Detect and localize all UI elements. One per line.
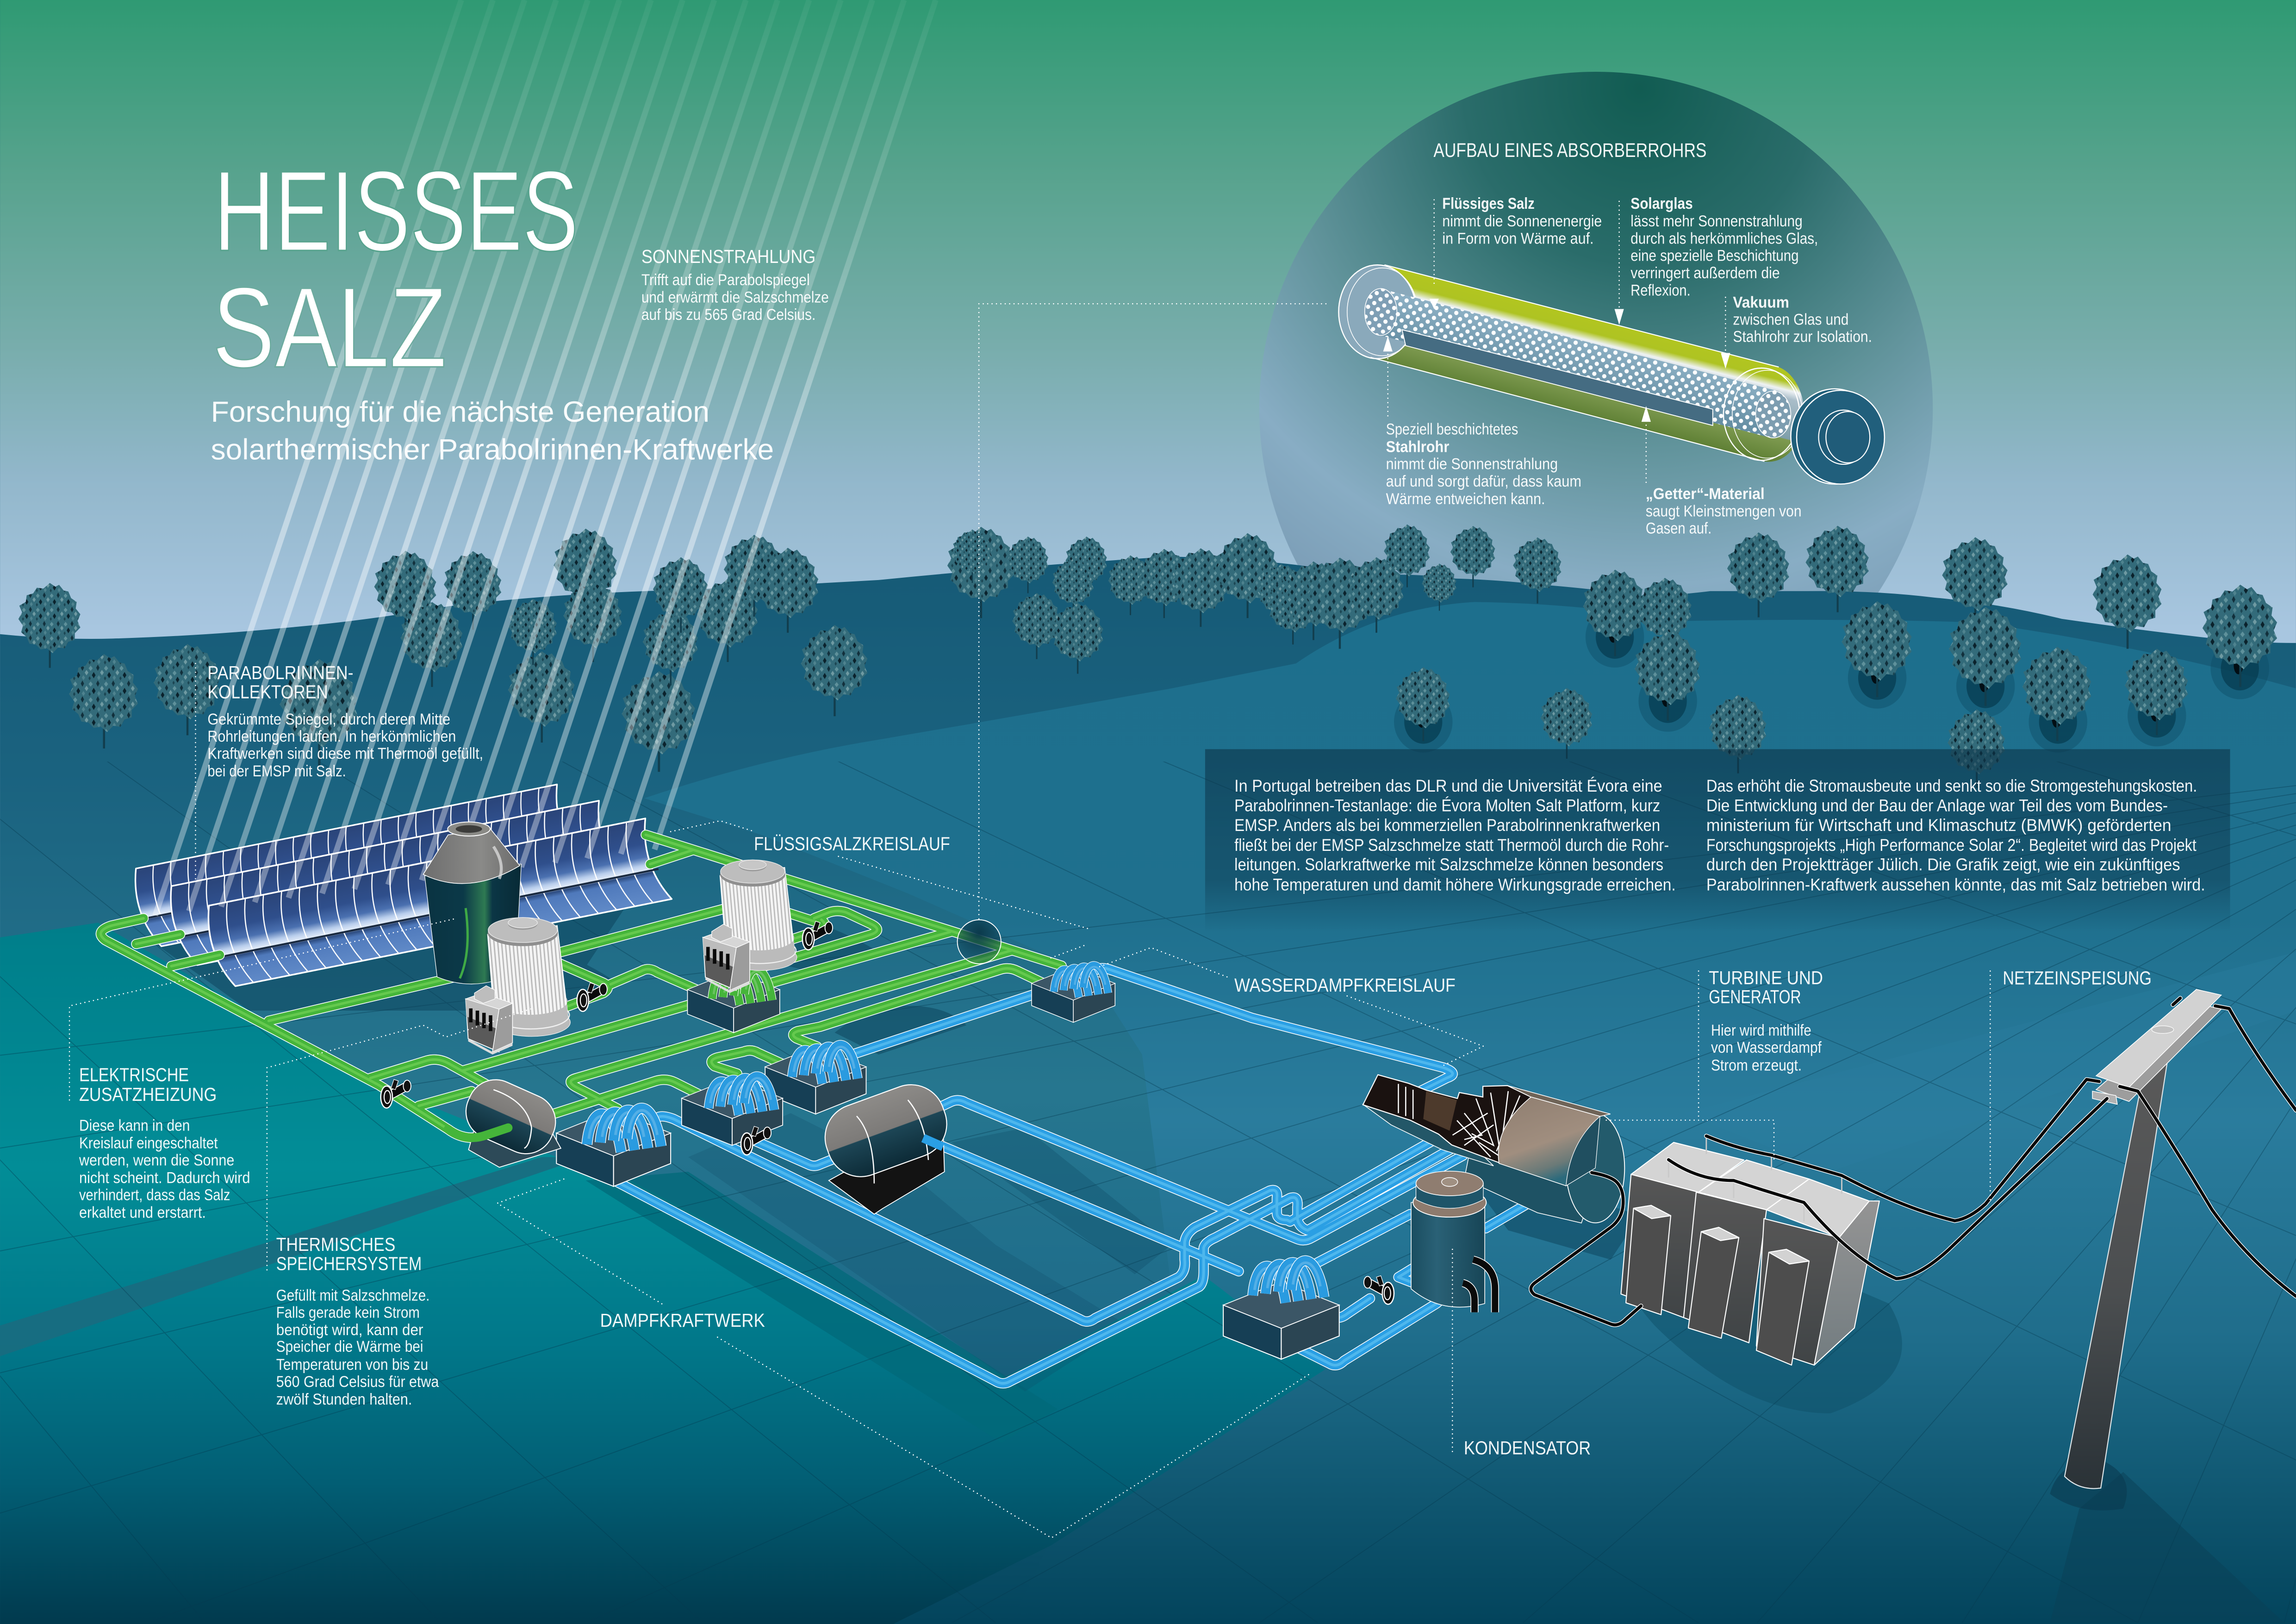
panel text: Aufbau eines Absorberrohrs: saugt Kleinstmengen von	[1646, 503, 1801, 520]
leader lines	[69, 663, 1990, 1538]
subtitle: Forschung für die nächste Generation	[211, 396, 709, 428]
panel text: Aufbau eines Absorberrohrs: nimmt die Sonnenstrahlung	[1386, 456, 1558, 473]
label: Turbine und Generator: GENERATOR	[1709, 986, 1801, 1007]
label: Sonnenstrahlung: und erwärmt die Salzschmelze	[641, 289, 829, 306]
text block: right column	[1706, 776, 2205, 894]
panel text: Aufbau eines Absorberrohrs: Stahlrohr zur Isolation.	[1733, 328, 1872, 346]
text block: left column: leitungen. Solarkraftwerke mit Salzschmelze können besonders	[1234, 855, 1663, 874]
sun rays	[155, 0, 936, 915]
label: Parabolrinnen-Kollektoren: Gekrümmte Spiegel, durch deren Mitte	[207, 711, 450, 728]
label: Elektrische Zusatzheizung	[79, 1064, 250, 1221]
panel text: Aufbau eines Absorberrohrs: Wärme entweichen kann.	[1386, 490, 1545, 508]
label: Thermisches Speichersystem: benötigt wird, kann der	[276, 1321, 423, 1339]
text block: right column: Forschungsprojekts „High Performance Solar 2“. Begleitet wird das Projekt	[1706, 836, 2196, 855]
cold salt tanks with controls	[466, 860, 796, 1055]
text panel background	[1205, 749, 2230, 932]
label: Kondensator: KONDENSATOR	[1464, 1437, 1591, 1459]
power pole	[2065, 989, 2221, 1488]
label: Sonnenstrahlung: Trifft auf die Parabolspiegel	[641, 271, 810, 289]
text block: left column: fließt bei der EMSP Salzschmelze statt Thermoöl durch die Rohr-	[1234, 836, 1669, 855]
label: Flüssigsalzkreislauf: FLÜSSIGSALZKREISLAUF	[754, 833, 950, 855]
heat tank on the salt circuit	[457, 1071, 565, 1168]
panel text: Aufbau eines Absorberrohrs: Vakuum	[1733, 294, 1789, 311]
panel text: Aufbau eines Absorberrohrs: „Getter“-Material	[1646, 485, 1765, 503]
label: Parabolrinnen-Kollektoren: bei der EMSP mit Salz.	[207, 762, 346, 780]
label: Thermisches Speichersystem: Speicher die Wärme bei	[276, 1338, 423, 1355]
label: Elektrische Zusatzheizung: ZUSATZHEIZUNG	[79, 1084, 217, 1105]
panel: absorber tube circle backdrop	[1259, 72, 1933, 745]
label: Sonnenstrahlung	[641, 246, 829, 324]
green molten salt pipes	[101, 835, 1062, 1138]
panel text: Aufbau eines Absorberrohrs: lässt mehr Sonnenstrahlung	[1630, 212, 1803, 230]
text block: right column: Parabolrinnen-Kraftwerk aussehen könnte, das mit Salz betrieben wird.	[1706, 875, 2205, 894]
panel text: Aufbau eines Absorberrohrs: AUFBAU EINES ABSORBERROHRS	[1433, 139, 1706, 161]
absorber tube pointers	[979, 200, 1730, 919]
absorber tube illustration	[1338, 265, 1885, 484]
pipe end into heat tank	[448, 1128, 508, 1138]
label: Thermisches Speichersystem: Gefüllt mit Salzschmelze.	[276, 1287, 429, 1304]
text block: left column: EMSP. Anders als bei kommerziellen Parabolrinnenkraftwerken	[1234, 816, 1660, 835]
landscape ground	[0, 556, 2296, 1624]
panel text: Aufbau eines Absorberrohrs	[1386, 139, 1872, 537]
perspective ground grid	[0, 762, 2296, 1574]
subtitle: solarthermischer Parabolrinnen-Kraftwerke	[211, 433, 774, 466]
transformer terminals	[1668, 1136, 1842, 1222]
label: Elektrische Zusatzheizung: Kreislauf eingeschaltet	[79, 1134, 218, 1152]
label: Thermisches Speichersystem	[276, 1234, 439, 1408]
label: Wasserdampfkreislauf: WASSERDAMPFKREISLAUF	[1234, 974, 1456, 996]
panel text: Aufbau eines Absorberrohrs: verringert außerdem die	[1630, 264, 1780, 282]
trees	[19, 525, 2277, 788]
panel text: Aufbau eines Absorberrohrs: zwischen Glas und	[1733, 311, 1848, 329]
magnifier circle on pipe	[958, 920, 1001, 964]
label: Netzeinspeisung: NETZEINSPEISUNG	[2003, 967, 2152, 988]
label: Parabolrinnen-Kollektoren: KOLLEKTOREN	[207, 681, 328, 702]
label: Elektrische Zusatzheizung: ELEKTRISCHE	[79, 1064, 189, 1086]
panel text: Aufbau eines Absorberrohrs: Reflexion.	[1630, 281, 1691, 299]
pipe stubs into steam tank	[923, 1138, 943, 1147]
label: Thermisches Speichersystem: SPEICHERSYSTEM	[276, 1253, 422, 1274]
panel text: Aufbau eines Absorberrohrs: Stahlrohr	[1386, 438, 1449, 456]
condenser	[1411, 1171, 1495, 1312]
transformers	[1621, 1143, 1879, 1365]
subtitle	[211, 396, 774, 466]
label: Thermisches Speichersystem: Falls gerade kein Strom	[276, 1304, 420, 1321]
pumps	[381, 921, 1394, 1304]
blue heat exchangers	[556, 965, 1339, 1359]
panel text: Aufbau eines Absorberrohrs: in Form von Wärme auf.	[1442, 230, 1594, 247]
title: HEISSES	[214, 148, 579, 275]
label: Sonnenstrahlung: auf bis zu 565 Grad Celsius.	[641, 306, 815, 324]
green heat exchanger	[687, 969, 780, 1032]
label: Elektrische Zusatzheizung: erkaltet und erstarrt.	[79, 1204, 206, 1221]
label: Elektrische Zusatzheizung: Diese kann in den	[79, 1117, 190, 1134]
ground shadows of the plant	[146, 879, 1640, 1260]
panel text: Aufbau eines Absorberrohrs: Flüssiges Salz	[1442, 195, 1535, 212]
label: Thermisches Speichersystem: zwölf Stunden halten.	[276, 1391, 412, 1408]
text block: left column: hohe Temperaturen und damit höhere Wirkungsgrade erreichen.	[1234, 875, 1676, 894]
label: Thermisches Speichersystem: 560 Grad Celsius für etwa	[276, 1373, 439, 1391]
steam tank	[815, 1075, 956, 1214]
label: Parabolrinnen-Kollektoren	[207, 662, 483, 780]
label: Sonnenstrahlung: SONNENSTRAHLUNG	[641, 246, 815, 267]
label: Turbine und Generator: von Wasserdampf	[1711, 1039, 1822, 1056]
label: Turbine und Generator: Strom erzeugt.	[1711, 1056, 1802, 1074]
hot salt storage tank	[423, 822, 521, 984]
text block: left column: Parabolrinnen-Testanlage: die Évora Molten Salt Platform, kurz	[1234, 796, 1660, 815]
label: Parabolrinnen-Kollektoren: Kraftwerken sind diese mit Thermoöl gefüllt,	[207, 745, 483, 762]
text block: left column	[1234, 776, 1676, 894]
panel text: Aufbau eines Absorberrohrs: Gasen auf.	[1646, 520, 1711, 537]
text block: left column: In Portugal betreiben das DLR und die Universität Évora eine	[1234, 776, 1662, 795]
label: Elektrische Zusatzheizung: nicht scheint. Dadurch wird	[79, 1169, 250, 1187]
parabolic trough collectors	[136, 784, 672, 986]
label: Turbine und Generator: TURBINE UND	[1709, 967, 1823, 988]
title	[212, 148, 579, 392]
label: Thermisches Speichersystem: THERMISCHES	[276, 1234, 395, 1255]
panel text: Aufbau eines Absorberrohrs: auf und sorgt dafür, dass kaum	[1386, 473, 1581, 490]
label: Dampfkraftwerk: DAMPFKRAFTWERK	[600, 1310, 765, 1331]
label: Thermisches Speichersystem: Temperaturen von bis zu	[276, 1356, 428, 1374]
blue water steam pipes	[569, 968, 1546, 1383]
panel text: Aufbau eines Absorberrohrs: durch als herkömmliches Glas,	[1630, 230, 1818, 247]
panel text: Aufbau eines Absorberrohrs: Solarglas	[1630, 195, 1693, 212]
text block: right column: ministerium für Wirtschaft und Klimaschutz (BMWK) geförderten	[1706, 816, 2172, 835]
label: Parabolrinnen-Kollektoren: Rohrleitungen laufen. In herkömmlichen	[207, 728, 456, 745]
text block: right column: durch den Projektträger Jülich. Die Grafik zeigt, wie ein zukünftiges	[1706, 855, 2180, 874]
label: Elektrische Zusatzheizung: verhindert, dass das Salz	[79, 1187, 230, 1204]
panel text: Aufbau eines Absorberrohrs: nimmt die Sonnenenergie	[1442, 212, 1602, 230]
label: Parabolrinnen-Kollektoren: PARABOLRINNEN-	[207, 662, 354, 683]
title: SALZ	[212, 264, 447, 392]
label: Turbine und Generator	[1709, 967, 1823, 1074]
panel text: Aufbau eines Absorberrohrs: eine spezielle Beschichtung	[1630, 247, 1798, 264]
power cables	[1531, 998, 2296, 1325]
panel text: Aufbau eines Absorberrohrs: Speziell beschichtetes	[1386, 421, 1518, 438]
label: Elektrische Zusatzheizung: werden, wenn die Sonne	[79, 1151, 234, 1169]
text block: right column: Das erhöht die Stromausbeute und senkt so die Stromgestehungskosten.	[1706, 776, 2197, 795]
turbine and generator	[1363, 1075, 1624, 1223]
text block: right column: Die Entwicklung und der Bau der Anlage war Teil des vom Bundes-	[1706, 796, 2168, 815]
label: Turbine und Generator: Hier wird mithilfe	[1711, 1022, 1811, 1039]
